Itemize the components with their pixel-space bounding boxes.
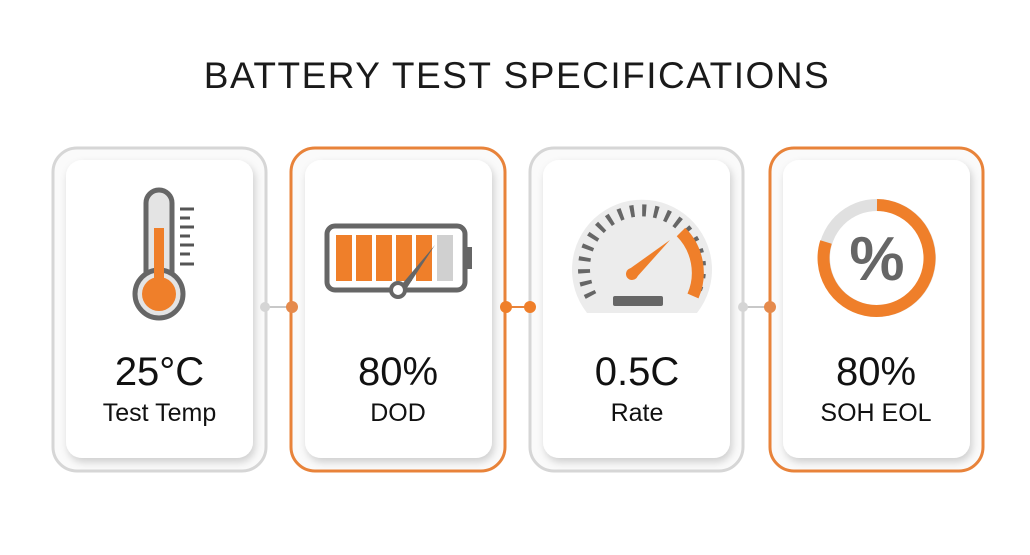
value: 80%: 80% bbox=[836, 350, 916, 394]
panel: rate bbox=[530, 148, 743, 471]
value: 80%: 80% bbox=[358, 350, 438, 394]
icon: thermometer bbox=[135, 190, 194, 318]
title: BATTERY TEST SPECIFICATIONS bbox=[204, 55, 830, 96]
icon: percent ring bbox=[824, 205, 930, 311]
connector: 1-2 bbox=[260, 301, 298, 313]
label: Rate: Rate bbox=[611, 399, 663, 427]
panel: SOH EOL bbox=[770, 148, 983, 471]
label: DOD: DOD bbox=[370, 399, 426, 427]
value: 25°C: 25°C bbox=[115, 350, 204, 394]
connector: 3-4 bbox=[738, 301, 776, 313]
label: Test Temp: Test Temp bbox=[103, 399, 216, 427]
panel: test temp bbox=[53, 148, 266, 471]
label: SOH EOL: SOH EOL bbox=[820, 399, 932, 427]
icon: speedometer bbox=[572, 200, 712, 313]
value: 0.5C: 0.5C bbox=[595, 350, 679, 394]
connector: 2-3 bbox=[500, 301, 536, 313]
panel: DOD bbox=[291, 148, 505, 471]
icon: percent ring: % bbox=[849, 225, 905, 294]
icon: battery gauge bbox=[327, 226, 472, 297]
